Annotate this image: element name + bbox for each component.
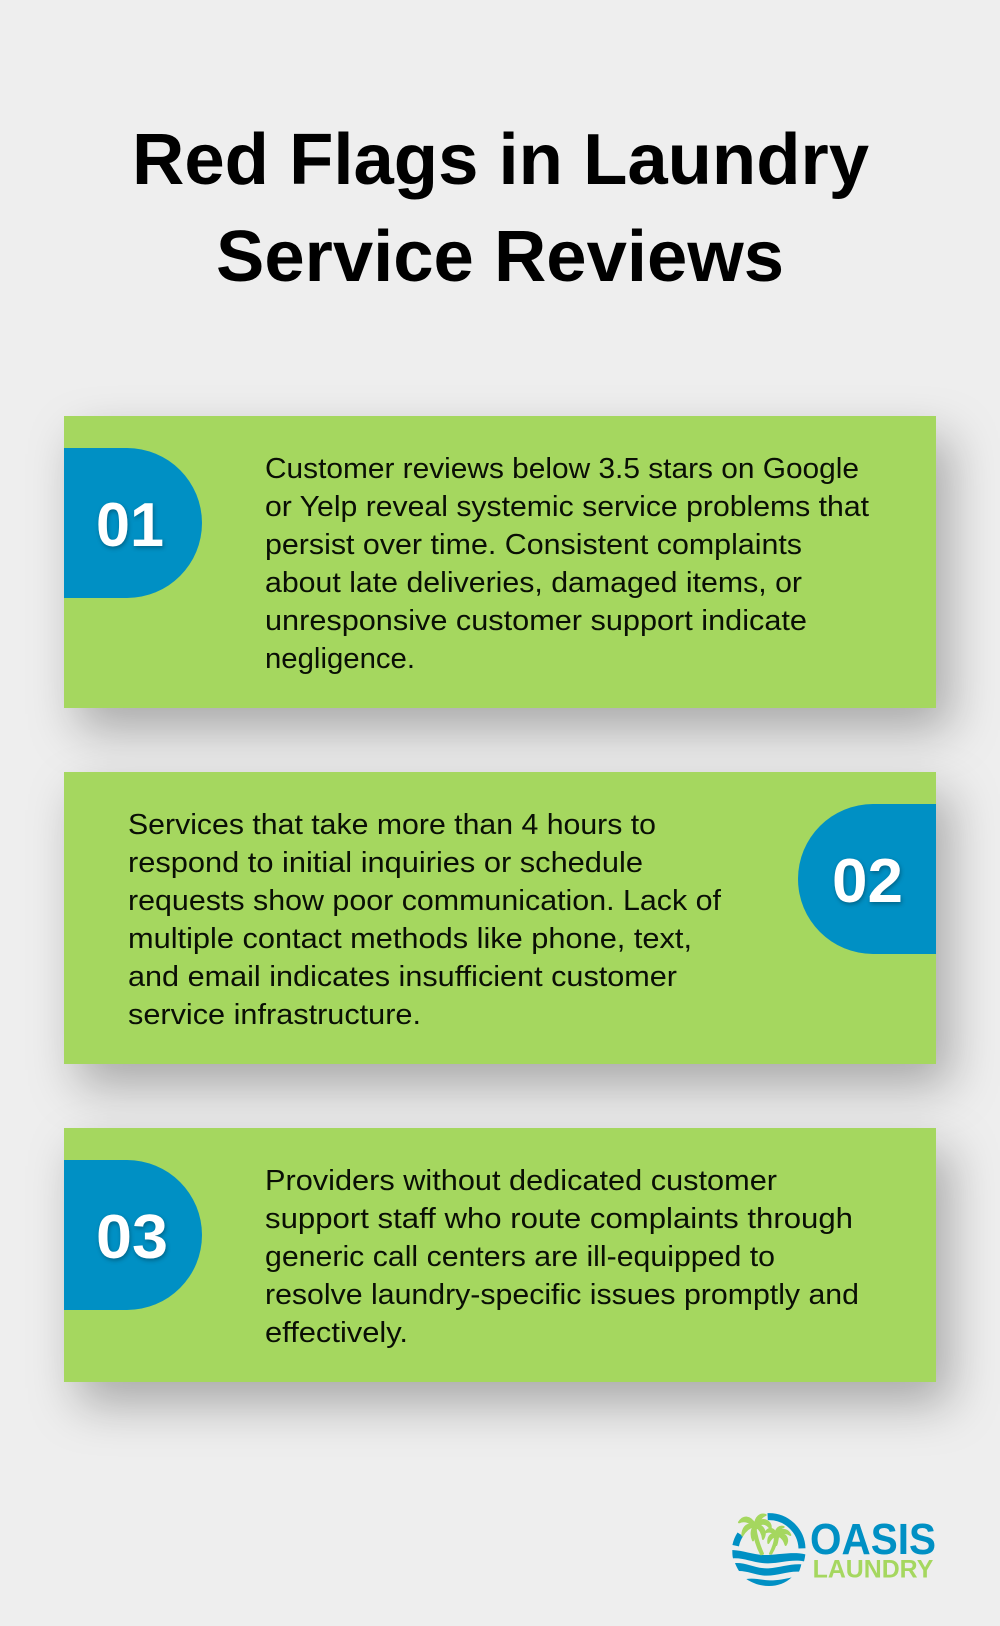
text block: item 03: effectively. [265,1317,408,1349]
text block: item 01: or Yelp reveal systemic service problems that [265,491,869,523]
text block: item 01 [265,453,869,675]
badge: 02: 02 [832,847,903,916]
text block: item 01: persist over time. Consistent complaints [265,529,802,561]
badge: 03 [64,1160,202,1310]
text block: item 02 [128,809,722,1031]
panel: item 02 [64,772,936,1064]
text block: item 02: service infrastructure. [128,999,421,1031]
logo: Oasis Laundry [732,1515,936,1586]
text block: item 02: and email indicates insufficient customer [128,961,677,993]
text block: item 01: unresponsive customer support indicate [265,605,807,637]
wordmark: LAUNDRY [813,1555,933,1583]
panel: item 03 [64,1128,936,1382]
badge: 02 [798,804,936,954]
wordmark [810,1515,936,1583]
text block: item 03 [265,1165,859,1349]
icon: ring and waves [732,1517,805,1586]
text block: item 03: resolve laundry-specific issues promptly and [265,1279,859,1311]
icon: palm trees [739,1515,790,1554]
text block: item 03: Providers without dedicated customer [265,1165,777,1197]
wordmark: OASIS [810,1515,936,1564]
text block: item 01: Customer reviews below 3.5 stars on Google [265,453,859,485]
text block: item 02: Services that take more than 4 hours to [128,809,656,841]
title: Red Flags in Laundry [132,120,869,200]
badge: 01 [64,448,202,598]
text block: item 03: generic call centers are ill-equipped to [265,1241,775,1273]
text block: item 01: about late deliveries, damaged items, or [265,567,802,599]
text block: item 02: multiple contact methods like phone, text, [128,923,692,955]
title: Service Reviews [216,217,784,297]
title [132,120,869,297]
text block: item 02: respond to initial inquiries or schedule [128,847,643,879]
text block: item 01: negligence. [265,643,415,675]
text block: item 02: requests show poor communication. Lack of [128,885,722,917]
text block: item 03: support staff who route complaints through [265,1203,853,1235]
badge: 01: 01 [96,491,164,560]
badge: 03: 03 [96,1203,168,1272]
panel: item 01 [64,416,936,708]
